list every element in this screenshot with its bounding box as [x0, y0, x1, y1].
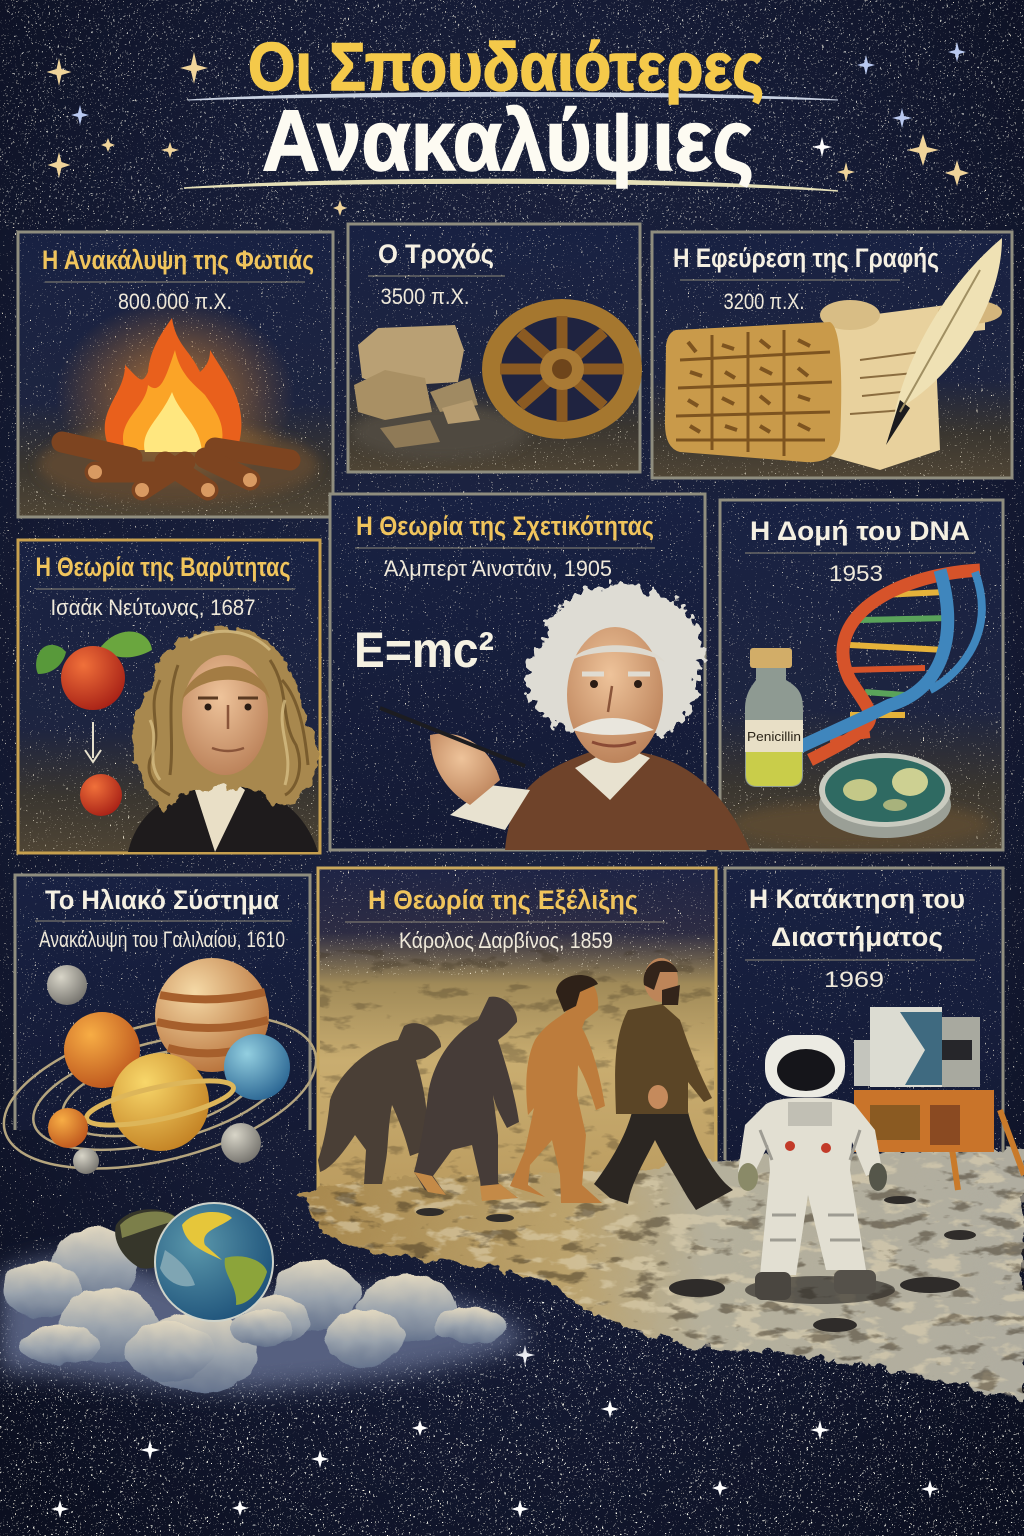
title line 1: Οι Σπουδαιότερες [248, 29, 764, 105]
subtitle: gravity: Ισαάκ Νεύτωνας, 1687 [50, 595, 256, 620]
foreground cloud puffs [126, 1308, 292, 1382]
illustration: lunar surface [300, 1148, 1024, 1400]
date: DNA: 1953 [829, 561, 883, 586]
illustration: planets [0, 958, 332, 1197]
panel: gravity [18, 540, 320, 853]
heading: evolution: Η Θεωρία της Εξέλιξης [368, 885, 638, 915]
heading: writing: Η Εφεύρεση της Γραφής [673, 243, 939, 273]
illustration: petri dish [819, 753, 951, 838]
illustration: ground rocks [730, 801, 990, 849]
date: fire: 800.000 π.Χ. [118, 289, 232, 314]
heading: relativity: Η Θεωρία της Σχετικότητας [356, 511, 654, 541]
heading: wheel: Ο Τροχός [378, 239, 494, 269]
illustration: clouds [0, 1227, 530, 1392]
panel: space: Διαστήματος [771, 922, 943, 952]
title [184, 29, 838, 191]
illustration: Einstein portrait [505, 585, 750, 850]
vial label: Penicillin [747, 729, 801, 744]
title rules [188, 92, 838, 100]
subtitle: evolution: Κάρολος Δαρβίνος, 1859 [399, 928, 613, 953]
illustration: penicillin vial [745, 648, 803, 787]
illustration: evolution figures [318, 958, 733, 1210]
panel: writing [652, 232, 1012, 478]
illustration: Newton portrait [128, 628, 318, 852]
illustration: rocks [352, 325, 528, 460]
figure: early hominid [414, 997, 519, 1200]
date: space: 1969 [824, 967, 884, 992]
illustration: wooden wheel [482, 299, 642, 439]
title line 2: Ανακαλύψιες [262, 93, 754, 189]
panel: evolution [318, 868, 716, 1190]
heading: solar system: Το Ηλιακό Σύστημα [45, 885, 279, 915]
heading: DNA: Η Δομή του DNA [750, 516, 970, 546]
figure: ape [318, 1023, 441, 1184]
panel: DNA [720, 500, 1003, 850]
illustration: hand with pen [380, 708, 530, 830]
illustration: earth [155, 1203, 273, 1321]
illustration: apple falling [36, 632, 152, 816]
illustration: astronaut [738, 1035, 895, 1304]
heading: space: Η Κατάκτηση του [749, 884, 965, 914]
equation: E=mc² [354, 622, 494, 678]
subtitle: relativity: Άλμπερτ Άινστάιν, 1905 [384, 556, 612, 581]
illustration: scroll [790, 300, 1002, 470]
date: writing: 3200 π.Χ. [724, 289, 804, 314]
cloud puffs [2, 1227, 506, 1392]
heading: fire: Η Ανακάλυψη της Φωτιάς [42, 245, 314, 275]
date: wheel: 3500 π.Χ. [380, 284, 470, 309]
panel: fire [18, 232, 333, 517]
figure: Homo erectus [510, 977, 605, 1203]
illustration: quill [886, 238, 1002, 445]
panel: relativity [330, 494, 750, 850]
illustration: DNA helix [775, 570, 982, 760]
panel: solar system [0, 875, 332, 1197]
panel: wheel [348, 224, 642, 472]
figure: modern human [594, 958, 733, 1210]
illustration: lunar module [854, 1007, 1024, 1190]
illustration: asteroid highlight [120, 1212, 178, 1238]
illustration: campfire [38, 300, 318, 505]
heading: gravity: Η Θεωρία της Βαρύτητας [36, 552, 290, 582]
illustration: small asteroid [115, 1209, 182, 1269]
illustration: clay tablet [665, 322, 841, 462]
cloud base [0, 1258, 530, 1390]
panel: space [725, 868, 1003, 1160]
subtitle: solar system: Ανακάλυψη του Γαλιλαίου, 1610 [39, 927, 285, 952]
